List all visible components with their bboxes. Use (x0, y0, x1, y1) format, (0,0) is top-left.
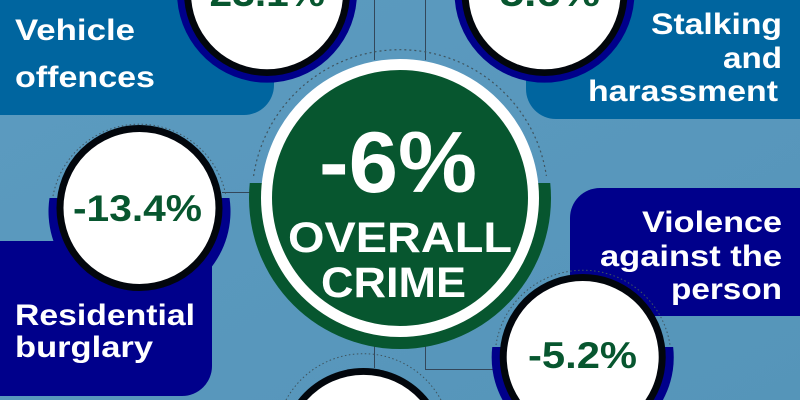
label: stalking and harassment: Stalking (651, 8, 782, 41)
badge: stalking value (455, 0, 634, 83)
badge: residential burglary value (49, 124, 230, 302)
label: violence against the person: against the (600, 240, 782, 273)
label: stalking and harassment (588, 8, 782, 108)
label: residential burglary: burglary (15, 331, 153, 364)
badge: violence value: -5.2% (528, 335, 637, 376)
label: violence against the person: Violence (642, 206, 782, 239)
badge: vehicle offences value (177, 0, 357, 83)
badge: violence value (492, 270, 674, 400)
caption (288, 214, 512, 307)
label: vehicle offences (15, 14, 155, 94)
panel: vehicle offences (0, 0, 274, 115)
panel: stalking and harassment (526, 0, 800, 119)
caption: CRIME (321, 259, 466, 307)
label: residential burglary: Residential (15, 299, 195, 332)
label: vehicle offences: Vehicle (15, 14, 135, 47)
panel: violence against the person (570, 188, 800, 316)
label: vehicle offences: offences (15, 61, 155, 94)
label: residential burglary (15, 299, 195, 364)
label: stalking and harassment: and (723, 42, 782, 75)
label: violence against the person: person (671, 273, 782, 306)
label: stalking and harassment: harassment (588, 75, 778, 108)
badge: overall crime (249, 50, 551, 349)
caption: OVERALL (288, 214, 512, 262)
badge: residential burglary value: -13.4% (73, 188, 202, 229)
badge: bottom value (286, 354, 441, 400)
panel: residential burglary (0, 241, 212, 396)
connector lines (222, 0, 493, 370)
label: violence against the person (600, 206, 782, 306)
big number: -6% (319, 115, 477, 211)
